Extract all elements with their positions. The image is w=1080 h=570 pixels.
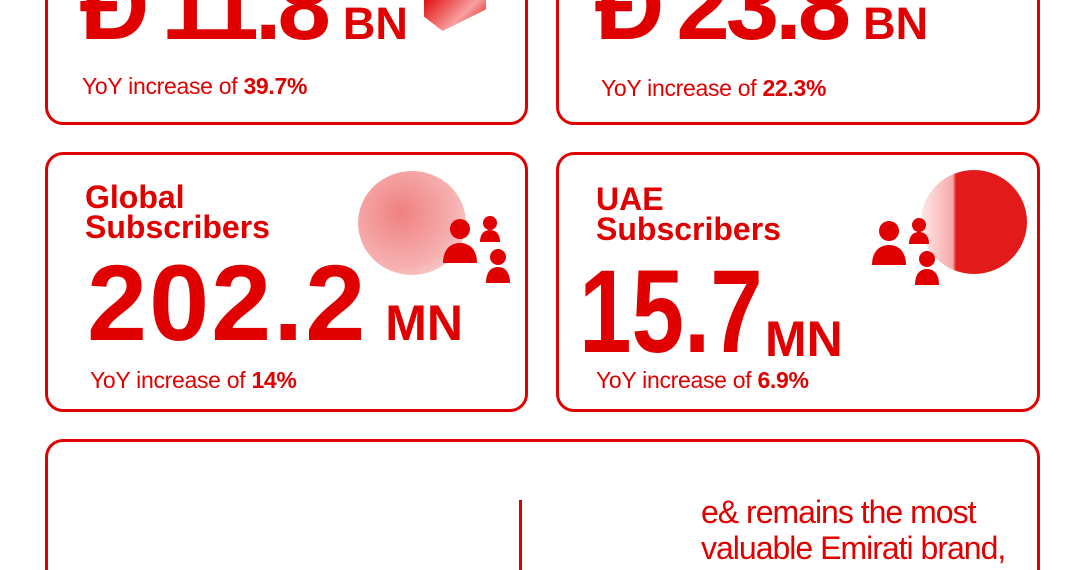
- yoy: YoY increase of 6.9%: [596, 367, 809, 393]
- icon: globe: [358, 171, 466, 275]
- yoy: YoY increase of 14%: [90, 367, 297, 393]
- heading: Subscribers: [596, 211, 781, 247]
- unit: MN: [765, 311, 843, 367]
- heading: UAE: [596, 181, 664, 217]
- panel: global subscribers: [45, 152, 528, 412]
- panel: revenue card: [45, 0, 528, 125]
- value: 202.2 MN: [87, 242, 463, 363]
- icon: box: [424, 0, 486, 31]
- panel: second revenue card: [556, 0, 1040, 125]
- brand text: [701, 494, 1005, 566]
- divider line: [519, 500, 522, 570]
- panel: brand: [45, 439, 1040, 570]
- panel: UAE subscribers: [556, 152, 1040, 412]
- heading: Global: [85, 179, 185, 215]
- heading: [596, 181, 781, 247]
- heading: [85, 179, 270, 245]
- brand text: valuable Emirati brand,: [701, 530, 1005, 566]
- yoy: YoY increase of 22.3%: [601, 75, 826, 101]
- icon: people: [443, 216, 510, 283]
- revenue yoy: YoY increase of 39.7%: [82, 73, 307, 99]
- icon: flag circle: [921, 170, 1027, 274]
- heading: Subscribers: [85, 209, 270, 245]
- brand text: e& remains the most: [701, 494, 975, 530]
- value: 15.7: [579, 246, 763, 378]
- icon: people: [872, 218, 939, 285]
